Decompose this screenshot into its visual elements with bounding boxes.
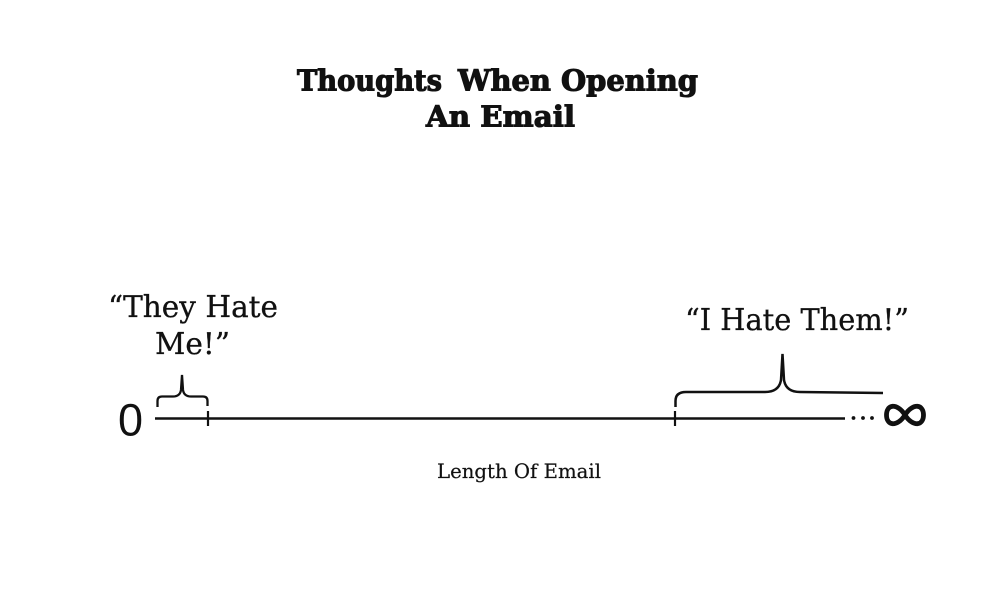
large brace bbox=[676, 354, 883, 407]
label: They Hate Me: “They Hate bbox=[108, 290, 278, 325]
infinity symbol bbox=[886, 406, 924, 424]
small brace bbox=[158, 375, 208, 407]
axis line with ticks bbox=[155, 411, 845, 426]
title: When Opening bbox=[457, 64, 698, 98]
title bbox=[297, 64, 698, 134]
axis continuation dots bbox=[852, 416, 874, 420]
axis zero label: 0 bbox=[118, 394, 143, 446]
title: An Email bbox=[425, 100, 575, 134]
axis title: Length Of Email bbox=[437, 459, 601, 483]
label: They Hate Me: Me!” bbox=[155, 327, 230, 362]
label: They Hate Me bbox=[108, 290, 278, 362]
title: Thoughts bbox=[297, 64, 442, 98]
label: I Hate Them: “I Hate Them!” bbox=[685, 303, 909, 338]
